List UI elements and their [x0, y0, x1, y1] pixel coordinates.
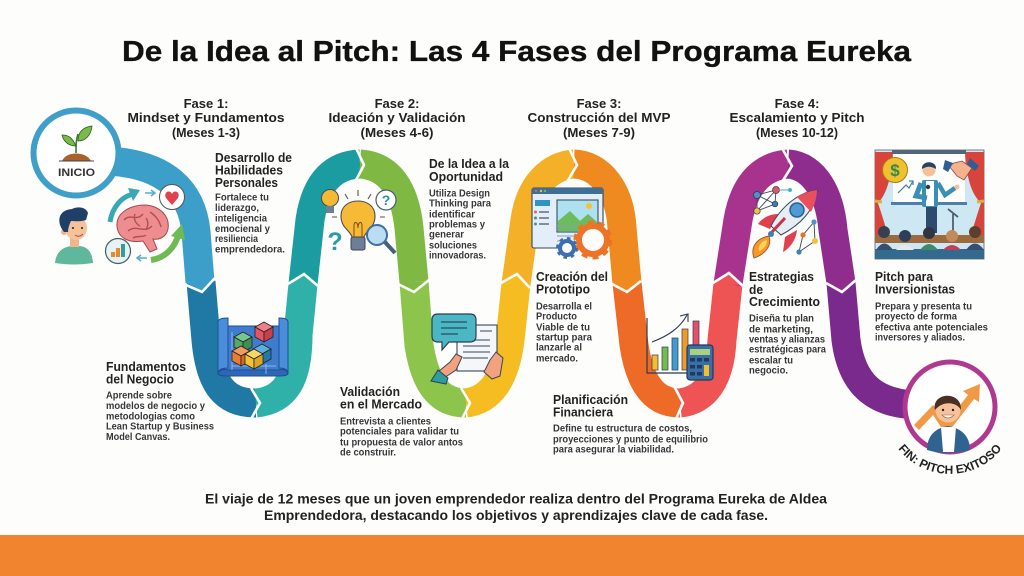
- icon: light bulbs and magnifier: ?: [382, 192, 390, 208]
- text: pitch para inversionistas: proyecto de forma: [875, 312, 958, 322]
- panel: pitch stage illustration: [875, 150, 984, 259]
- text: desarrollo de habilidades personales: Habilidades: [215, 164, 283, 178]
- text: planificacion financiera: Financiera: [553, 406, 614, 420]
- text: fundamentos del negocio: Aprende sobre: [106, 390, 173, 402]
- end badge: pitch exitoso: [905, 362, 995, 453]
- phase 4 heading: (Meses 10-12): [756, 125, 838, 140]
- text: desarrollo de habilidades personales: Desarrollo de: [215, 151, 292, 165]
- icon: young entrepreneur: [55, 207, 93, 264]
- text: desarrollo de habilidades personales: inteligencia: [215, 214, 268, 224]
- text: estrategias de crecimiento: Estrategias: [749, 270, 814, 284]
- phase 2 heading: [328, 96, 466, 140]
- text: estrategias de crecimiento: de marketing,: [749, 324, 813, 336]
- text: de la idea a la oportunidad: identificar: [429, 210, 475, 220]
- bottom orange band: [0, 535, 1024, 576]
- text: planificacion financiera: Define tu estructura de costos,: [553, 424, 692, 434]
- icon: blueprint with blocks: [218, 318, 288, 376]
- footer description: Emprendedora, destacando los objetivos y aprendizajes clave de cada fase.: [264, 508, 768, 523]
- text: pitch para inversionistas: Pitch para: [875, 270, 934, 284]
- text: pitch para inversionistas: Inversionistas: [875, 282, 955, 296]
- text: estrategias de crecimiento: negocio.: [749, 366, 788, 376]
- text: fundamentos del negocio: Model Canvas.: [106, 432, 170, 443]
- text: desarrollo de habilidades personales: emprendedora.: [215, 244, 285, 256]
- text: validacion en el mercado: Validación: [340, 385, 400, 399]
- phase 1 heading: Mindset y Fundamentos: [128, 110, 284, 125]
- phase 1 heading: [128, 96, 284, 140]
- phase 3 heading: [528, 96, 671, 140]
- text: estrategias de crecimiento: estratégicas para: [749, 344, 827, 356]
- start badge: inicio: INICIO: [58, 167, 95, 179]
- text: creacion del prototipo: Desarrolla el: [536, 302, 592, 312]
- text: desarrollo de habilidades personales: Fortalece tu: [215, 192, 269, 204]
- phase 1 heading: (Meses 1-3): [172, 125, 240, 140]
- text: creacion del prototipo: mercado.: [536, 354, 578, 364]
- text: desarrollo de habilidades personales: Personales: [215, 176, 278, 190]
- text: validacion en el mercado: de construir.: [340, 448, 396, 458]
- phase 4 heading: Fase 4:: [775, 96, 819, 111]
- text: de la idea a la oportunidad: Thinking para: [429, 198, 492, 210]
- text: desarrollo de habilidades personales: liderazgo,: [215, 203, 259, 214]
- text: planificacion financiera: proyecciones y punto de equilibrio: [553, 434, 708, 446]
- icon: light bulbs and magnifier: ?: [327, 228, 343, 256]
- text: planificacion financiera: Planificación: [553, 393, 628, 407]
- text: creacion del prototipo: Creación del: [536, 270, 608, 284]
- footer description: El viaje de 12 meses que un joven emprendedor realiza dentro del Programa Eureka de Aldea: [205, 492, 828, 506]
- text: de la idea a la oportunidad: innovadoras.: [429, 250, 486, 262]
- text: de la idea a la oportunidad: De la Idea a la: [429, 157, 510, 171]
- text: pitch para inversionistas: efectiva ante potenciales: [875, 322, 989, 334]
- text: de la idea a la oportunidad: soluciones: [429, 240, 478, 252]
- text: pitch para inversionistas: inversores y aliados.: [875, 332, 965, 344]
- footer description: [205, 492, 828, 523]
- text: pitch para inversionistas: Prepara y presenta tu: [875, 302, 972, 312]
- text: de la idea a la oportunidad: Utiliza Design: [429, 188, 490, 200]
- text: planificacion financiera: [553, 393, 708, 456]
- text: de la idea a la oportunidad: [429, 157, 510, 262]
- text: desarrollo de habilidades personales: [215, 151, 292, 256]
- title: De la Idea al Pitch: Las 4 Fases del Programa Eureka: [122, 36, 912, 68]
- text: pitch para inversionistas: [875, 270, 989, 344]
- phase 2 heading: Ideación y Validación: [328, 110, 466, 125]
- text: estrategias de crecimiento: Crecimiento: [749, 295, 820, 309]
- text: de la idea a la oportunidad: problemas y: [429, 220, 486, 230]
- phase 2 heading: Fase 2:: [375, 96, 419, 111]
- start badge: inicio: [34, 110, 118, 196]
- text: creacion del prototipo: [536, 270, 608, 364]
- text: desarrollo de habilidades personales: emocienal y: [215, 224, 271, 235]
- icon: bar chart and calculator: [647, 314, 713, 380]
- text: fundamentos del negocio: Lean Startup y Business: [106, 422, 215, 432]
- text: creacion del prototipo: Viable de tu: [536, 322, 590, 334]
- phase 4 heading: Escalamiento y Pitch: [730, 110, 865, 125]
- text: estrategias de crecimiento: ventas y alianzas: [749, 334, 826, 346]
- text: estrategias de crecimiento: escalar tu: [749, 356, 793, 366]
- text: fundamentos del negocio: del Negocio: [106, 372, 174, 386]
- text: de la idea a la oportunidad: Oportunidad: [429, 170, 503, 184]
- text: creacion del prototipo: lanzarle al: [536, 342, 582, 354]
- text: estrategias de crecimiento: [749, 270, 827, 376]
- text: fundamentos del negocio: [106, 360, 215, 443]
- text: fundamentos del negocio: metodologias como: [106, 412, 195, 422]
- icon: app window and gears: [532, 188, 610, 258]
- phase 3 heading: (Meses 7-9): [563, 125, 635, 140]
- text: planificacion financiera: para asegurar la viabilidad.: [553, 444, 674, 456]
- icon: rocket with networks: [753, 186, 818, 258]
- phase 3 heading: Construcción del MVP: [528, 110, 671, 125]
- text: de la idea a la oportunidad: generar: [429, 230, 464, 240]
- icon: light bulbs and magnifier: [322, 190, 396, 256]
- phase 1 heading: Fase 1:: [184, 96, 228, 111]
- text: validacion en el mercado: en el Mercado: [340, 398, 422, 412]
- phase 3 heading: Fase 3:: [577, 96, 621, 111]
- text: validacion en el mercado: potenciales para validar tu: [340, 426, 459, 438]
- phase 4 heading: [730, 96, 865, 140]
- phase 2 heading: (Meses 4-6): [360, 125, 434, 140]
- text: fundamentos del negocio: Fundamentos: [106, 360, 186, 374]
- end badge label: FIN: PITCH EXITOSO: [898, 444, 1000, 474]
- text: validacion en el mercado: [340, 385, 464, 458]
- panel: pitch stage illustration: $: [890, 161, 900, 180]
- text: validacion en el mercado: tu propuesta de valor antos: [340, 438, 464, 448]
- text: creacion del prototipo: Producto: [536, 312, 577, 322]
- text: creacion del prototipo: Prototipo: [536, 282, 590, 296]
- text: fundamentos del negocio: modelos de negocio y: [106, 401, 206, 412]
- icon: brain with growth arrows: [106, 184, 185, 264]
- winding ribbon path: [110, 148, 915, 419]
- text: validacion en el mercado: Entrevista a clientes: [340, 416, 432, 428]
- icon: chat bubble and document in hands: [431, 314, 503, 384]
- text: creacion del prototipo: startup para: [536, 332, 593, 344]
- text: estrategias de crecimiento: Diseña tu plan: [749, 314, 814, 324]
- text: estrategias de crecimiento: de: [749, 283, 763, 297]
- text: desarrollo de habilidades personales: resiliencia: [215, 234, 258, 245]
